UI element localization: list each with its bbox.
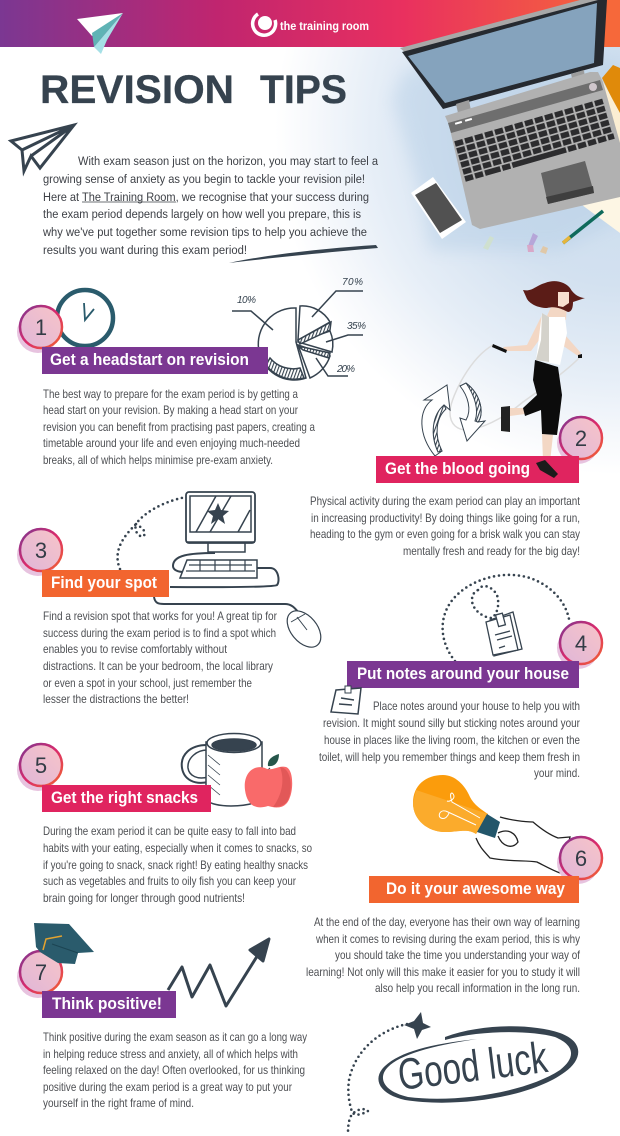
body text 1: head start on your revision. By making a head start on your bbox=[43, 404, 298, 417]
heading banner 4: Put notes around your house bbox=[357, 664, 569, 683]
title bbox=[40, 68, 347, 112]
body text 3: enables you to revise comfortably without bbox=[43, 643, 228, 656]
number badge 2: 2 bbox=[575, 426, 587, 451]
body text 6: At the end of the day, everyone has their own way of learning bbox=[314, 916, 580, 929]
heading banner 3 bbox=[42, 570, 169, 597]
chart: hand-drawn pie: 20% bbox=[336, 364, 355, 375]
chart: hand-drawn pie: 10% bbox=[237, 295, 256, 306]
title: TIPS bbox=[260, 68, 347, 112]
icon: teal paper plane bbox=[77, 13, 123, 54]
body text 7 bbox=[43, 1031, 307, 1110]
body text 1: timetable around your life and even enjoying much-needed bbox=[43, 437, 300, 450]
icon: circular arrows bbox=[422, 383, 485, 456]
text: Good luck: Good luck bbox=[395, 1033, 551, 1100]
illustration: woman jumping bbox=[492, 281, 585, 462]
icon: star bbox=[207, 503, 229, 524]
intro text: Here at The Training Room, we recognise that your success during bbox=[43, 190, 369, 204]
body text 7: positive during the exam period is a great way to put your bbox=[43, 1081, 292, 1094]
icon: trainer bbox=[536, 460, 558, 478]
good luck sign-off bbox=[348, 1012, 578, 1134]
panel: tip 2 bbox=[310, 281, 602, 558]
body text 5: if you're going to snack, snack right! By eating healthy snacks bbox=[43, 859, 308, 872]
panel: tip 1 bbox=[17, 277, 366, 467]
number badge 2 bbox=[557, 417, 602, 464]
number badge 3: 3 bbox=[35, 538, 47, 563]
body text 3: distractions. It can be your bedroom, the local library bbox=[43, 660, 273, 673]
body text 2: mentally fresh and ready for the big day! bbox=[403, 545, 580, 558]
heading banner 5: Get the right snacks bbox=[51, 788, 198, 807]
body text 4 bbox=[319, 700, 580, 780]
heading banner 2: Get the blood going bbox=[385, 459, 530, 478]
heading banner 1 bbox=[42, 347, 268, 374]
arrow: rising zigzag bbox=[168, 939, 269, 1006]
heading banner 6 bbox=[369, 876, 579, 903]
heading banner 6: Do it your awesome way bbox=[386, 879, 565, 898]
body text 3: success during the exam period is to find a spot which bbox=[43, 627, 276, 640]
brush underline bbox=[229, 245, 378, 263]
body text 5: During the exam period it can be quite easy to fall into bad bbox=[43, 825, 296, 838]
icon: graduation cap bbox=[34, 923, 94, 964]
heading banner 7 bbox=[42, 991, 176, 1018]
body text 6: also help you recall information in the long run. bbox=[375, 982, 580, 995]
icon: clock bbox=[57, 290, 113, 346]
body text 7: feeling relaxed on the day! Often overlooked, for us thinking bbox=[43, 1064, 305, 1077]
heading banner 3: Find your spot bbox=[51, 573, 157, 592]
icon: star bbox=[404, 1012, 431, 1039]
body text 3 bbox=[43, 610, 277, 706]
body text 1 bbox=[43, 388, 315, 467]
intro text: growing sense of anxiety as you begin to tackle your revision pile! bbox=[43, 172, 365, 186]
body text 1: breaks, all of which helps minimise pre-exam anxiety. bbox=[43, 454, 273, 467]
intro text: the exam period depends largely on how well you prepare, this is bbox=[43, 207, 361, 221]
body text 3: Find a revision spot that works for you! A great tip for bbox=[43, 610, 277, 623]
number badge 7: 7 bbox=[35, 960, 47, 985]
body text 5 bbox=[43, 825, 312, 905]
panel: tip 7 bbox=[17, 923, 307, 1110]
body text 4: revision. It might sound silly but sticking notes around your bbox=[323, 717, 580, 730]
intro text: why we've put together some revision tips to help you achieve the bbox=[42, 225, 367, 239]
number badge 7 bbox=[17, 951, 62, 998]
number badge 5: 5 bbox=[35, 753, 47, 778]
icon: apple bbox=[245, 754, 292, 807]
illustration: computer with keyboard and mouse bbox=[118, 492, 327, 653]
body text 2: in increasing productivity! By doing things like going for a run, bbox=[311, 512, 580, 525]
panel: tip 3 bbox=[17, 492, 327, 706]
body text 5: habits with your eating, especially when it comes to snacks, so bbox=[43, 842, 312, 855]
chart: hand-drawn pie bbox=[232, 277, 366, 380]
body text 3: lesser the distractions the better! bbox=[43, 693, 189, 706]
icon: pinned notes bbox=[486, 612, 522, 656]
body text 4: your mind. bbox=[534, 767, 580, 780]
illustration: skipping rope bbox=[450, 345, 580, 430]
body text 4: house in places like the living room, the kitchen or even the bbox=[324, 734, 580, 747]
panel: tip 6 bbox=[306, 775, 602, 995]
intro text bbox=[42, 154, 378, 257]
body text 2: Physical activity during the exam period can play an important bbox=[310, 495, 581, 508]
number badge 6: 6 bbox=[575, 846, 587, 871]
heading banner 1: Get a headstart on revision bbox=[50, 350, 249, 369]
body text 3: or even a spot in your school, just remember the bbox=[43, 677, 252, 690]
icon: small note bbox=[331, 686, 361, 714]
logo: the training room: the training room bbox=[280, 21, 369, 33]
body text 5: such as vegetables and fruits to oily fish you can keep your bbox=[43, 875, 296, 888]
icon: hand outline bbox=[476, 817, 570, 873]
page background tint bbox=[0, 47, 620, 477]
body text 2 bbox=[310, 495, 581, 558]
number badge 1: 1 bbox=[35, 315, 47, 340]
body text 6 bbox=[306, 916, 581, 995]
number badge 4 bbox=[557, 622, 602, 669]
body text 4: Place notes around your house to help you with bbox=[373, 700, 580, 713]
heading banner 2 bbox=[376, 456, 579, 483]
dotted flight path bbox=[348, 1024, 407, 1134]
intro text: results you want during this exam period! bbox=[43, 243, 247, 257]
chart: hand-drawn pie: 70% bbox=[342, 277, 363, 288]
body text 1: The best way to prepare for the exam period is by getting a bbox=[43, 388, 298, 401]
illustration: mug bbox=[182, 734, 262, 806]
header band bbox=[0, 0, 620, 47]
number badge 6 bbox=[557, 837, 602, 884]
number badge 5 bbox=[17, 744, 62, 791]
illustration: laptop on desk bbox=[392, 0, 620, 254]
icon: outline paper plane bbox=[11, 125, 74, 171]
body text 6: when it comes to revising during the exam period, this is why bbox=[315, 933, 580, 946]
intro text: With exam season just on the horizon, you may start to feel a bbox=[78, 154, 378, 168]
number badge 4: 4 bbox=[575, 631, 587, 656]
number badge 1 bbox=[17, 306, 62, 353]
body text 6: learning! Not only will this make it easier for you to study it will bbox=[306, 966, 580, 979]
brush ellipse bbox=[378, 1026, 578, 1103]
panel: tip 4 bbox=[319, 575, 602, 780]
body text 4: toilet, will help you remember things and keep them fresh in bbox=[319, 751, 580, 764]
chart: hand-drawn pie: 35% bbox=[347, 321, 366, 332]
body text 6: you should take the time you understanding your way of bbox=[335, 949, 581, 962]
heading banner 5 bbox=[42, 785, 211, 812]
icon: light bulb bbox=[413, 775, 500, 838]
heading banner 4 bbox=[347, 661, 579, 688]
body text 7: Think positive during the exam season as it can go a long way bbox=[43, 1031, 307, 1044]
title: REVISION bbox=[40, 68, 234, 112]
body text 7: in helping reduce stress and anxiety, all of which helps with bbox=[43, 1048, 298, 1061]
number badge 3 bbox=[17, 529, 62, 576]
body text 5: brain going for longer through good nutrients! bbox=[43, 892, 245, 905]
body text 1: revision you can benefit from practising past papers, creating a bbox=[43, 421, 315, 434]
panel: tip 5 bbox=[17, 734, 312, 905]
heading banner 7: Think positive! bbox=[52, 994, 162, 1013]
logo: the training room bbox=[253, 14, 369, 35]
body text 7: yourself in the right frame of mind. bbox=[43, 1097, 194, 1110]
dotted flight path bbox=[443, 575, 569, 661]
